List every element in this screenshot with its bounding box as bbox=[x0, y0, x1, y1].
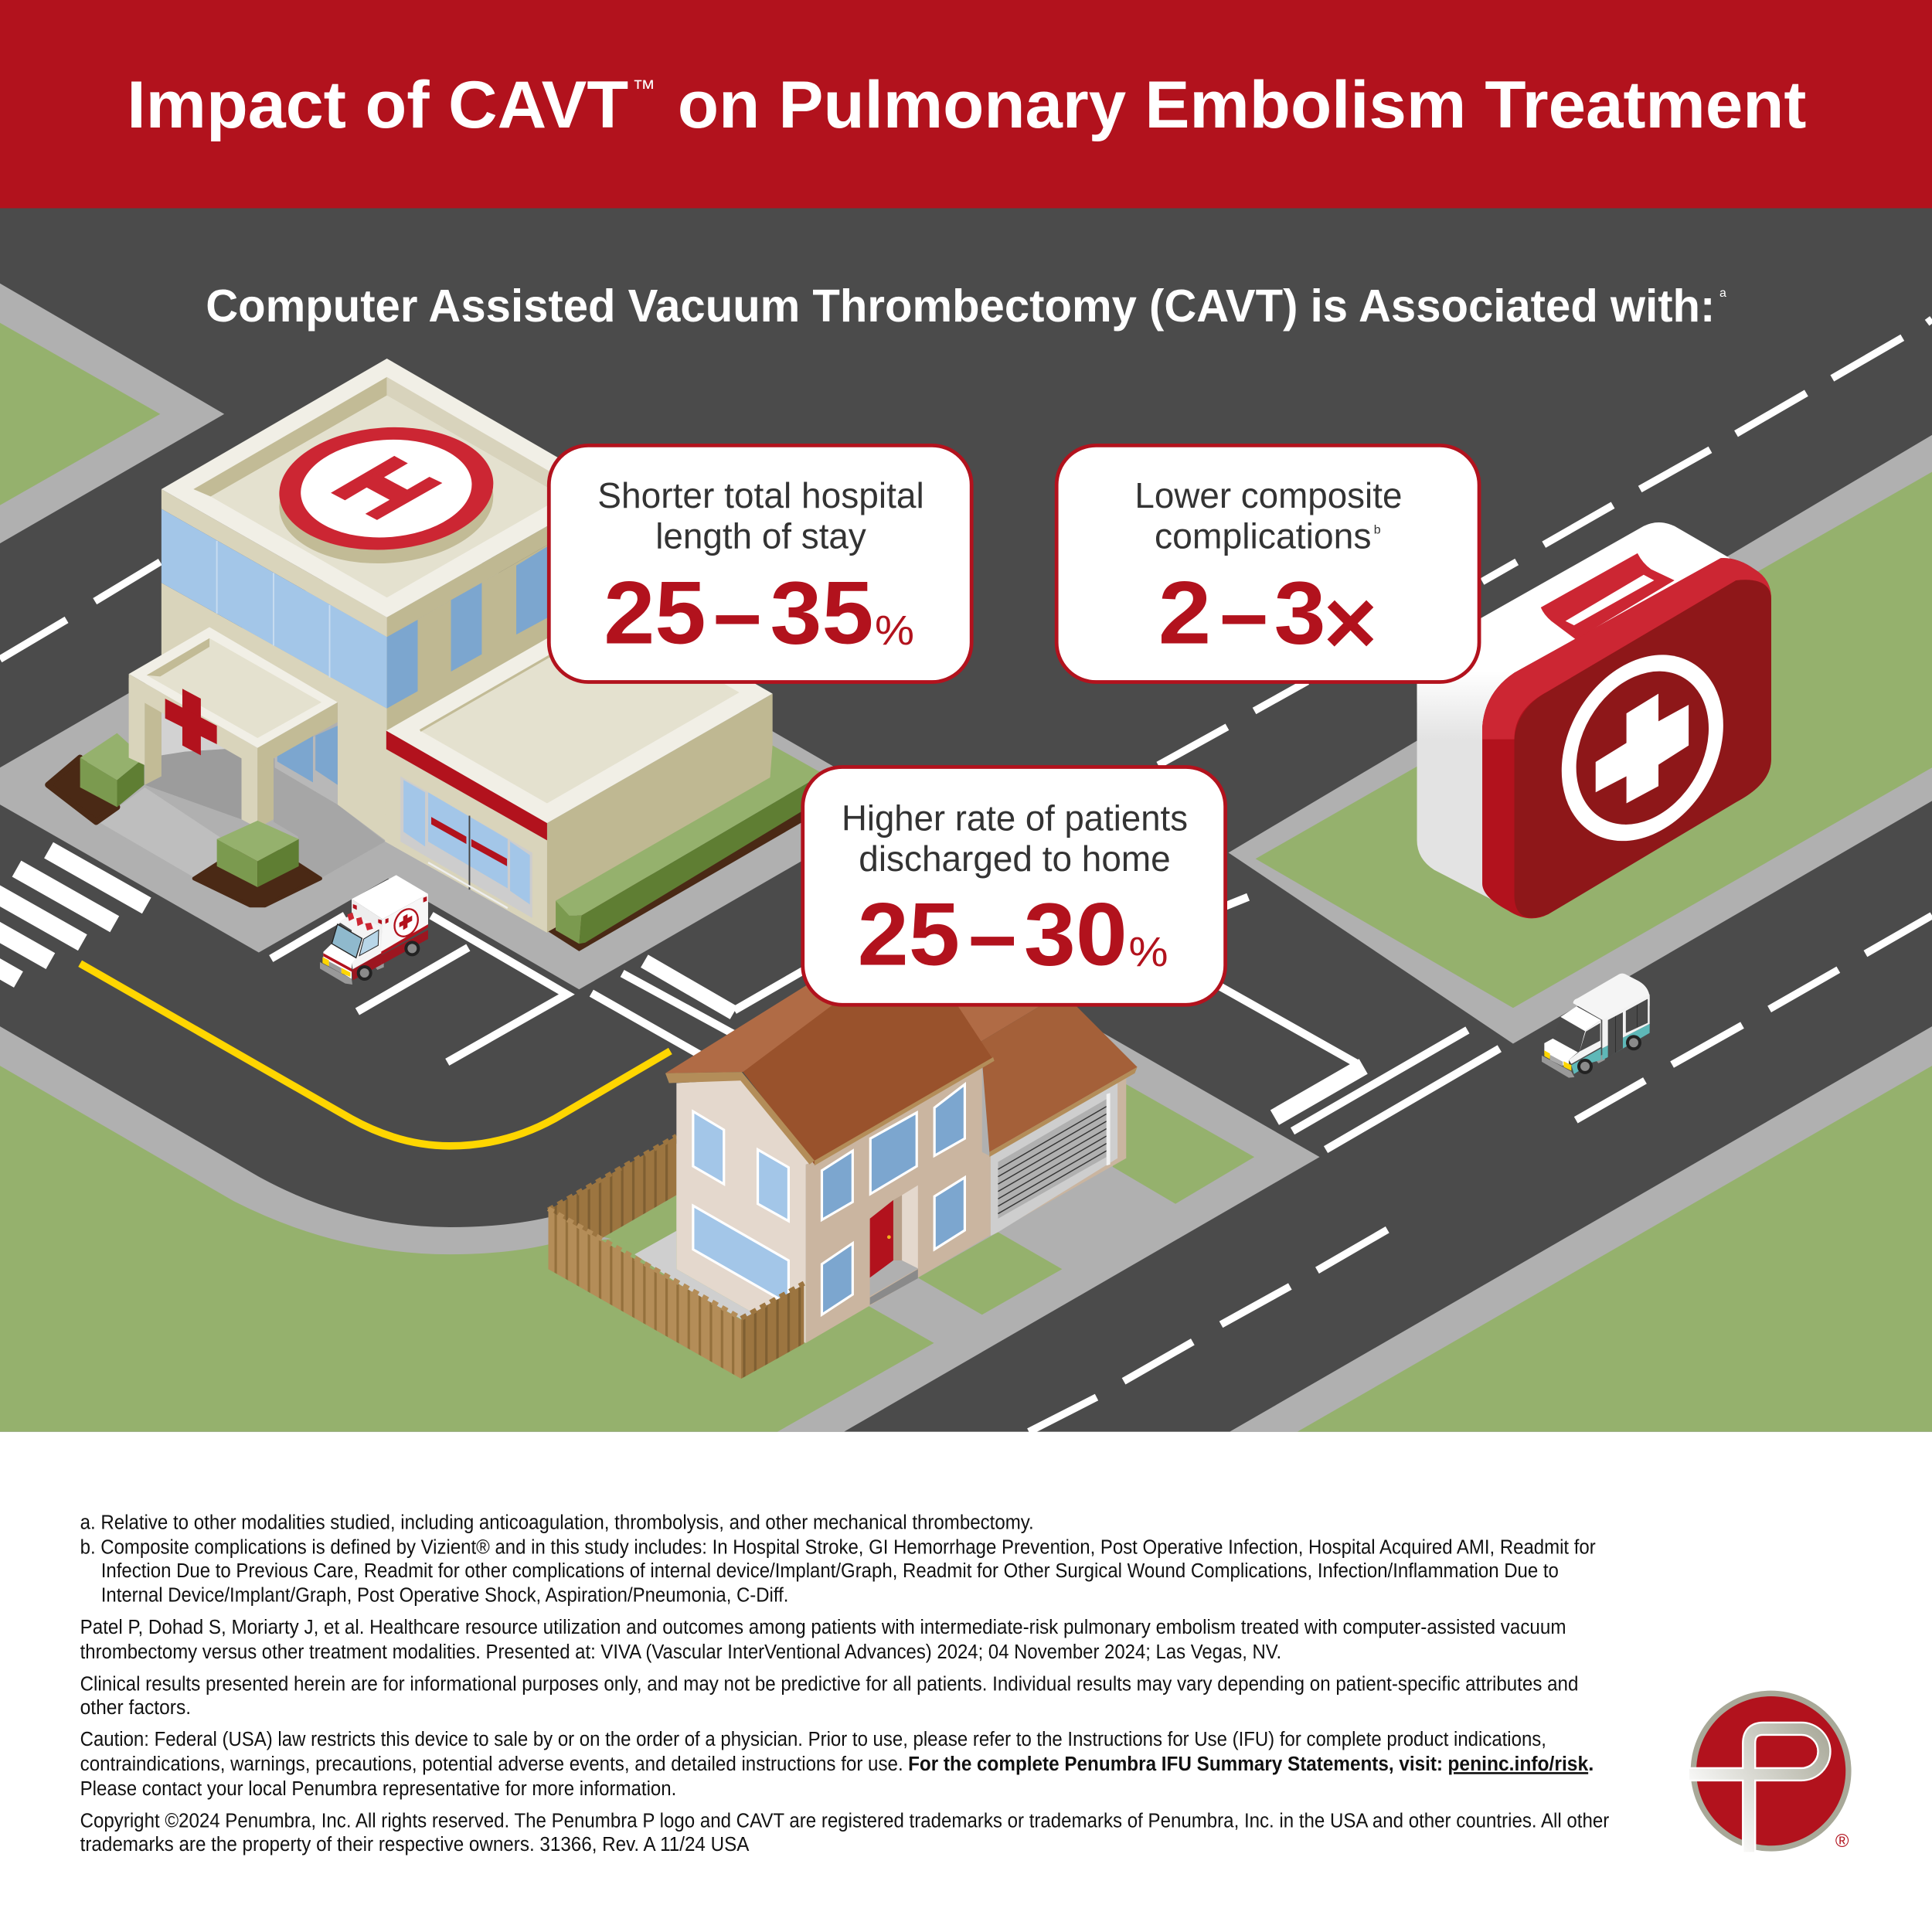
lane dashes: lower avenue bbox=[1029, 916, 1932, 1432]
title: on Pulmonary Embolism Treatment bbox=[678, 68, 1806, 142]
house roof bbox=[665, 974, 995, 1165]
title bbox=[127, 68, 1806, 142]
callout: discharged home: % bbox=[1128, 929, 1168, 975]
footnotes: trademarks are the property of their respective owners. 31366, Rev. A 11/24 USA bbox=[80, 1832, 750, 1855]
kit face bbox=[1515, 580, 1771, 917]
house with fence bbox=[549, 974, 1138, 1379]
heading: Computer Assisted Vacuum Thrombectomy (CAVT) is Associated with: bbox=[206, 281, 1715, 332]
main block walls bbox=[162, 489, 612, 842]
callout: complications: – bbox=[1219, 563, 1268, 662]
footnotes: For the complete Penumbra IFU Summary Statements, visit: bbox=[908, 1752, 1443, 1775]
block: house lawn and sidewalk bbox=[0, 1016, 1320, 1432]
kit handle bbox=[1541, 553, 1675, 639]
front fence bbox=[549, 1209, 804, 1379]
footnotes bbox=[80, 1511, 1609, 1855]
title: Impact of CAVT bbox=[127, 68, 628, 142]
helipad bbox=[275, 420, 498, 570]
callout: hospital stay: % bbox=[875, 607, 914, 654]
footnotes: Patel P, Dohad S, Moriarty J, et al. Healthcare resource utilization and outcomes among patients with intermediate-risk pulmonary embolism treated with computer-assisted vacuum bbox=[80, 1615, 1566, 1638]
footnotes: other factors. bbox=[80, 1696, 191, 1719]
footnotes: b. Composite complications is defined by Vizient® and in this study includes: In Hospital Stroke, GI Hemorrhage Prevention, Post Operative Infection, Hospital Acquired AMI, Readmit for bbox=[80, 1536, 1596, 1559]
title: ™ bbox=[632, 76, 655, 101]
callout: hospital stay: length of stay bbox=[655, 516, 867, 556]
footnotes: Copyright ©2024 Penumbra, Inc. All rights reserved. The Penumbra P logo and CAVT are registered trademarks or trademarks of Penumbra, Inc. in the USA and other countries. All other bbox=[80, 1808, 1609, 1832]
footnotes: . bbox=[1588, 1752, 1594, 1775]
callout: hospital stay: – bbox=[713, 563, 761, 662]
hospital grounds bbox=[99, 758, 385, 879]
house walls bbox=[676, 1068, 989, 1343]
icon: red cross sign bbox=[165, 689, 217, 755]
footnotes: Clinical results presented herein are for informational purposes only, and may not be predictive for all patients. Individual results may vary depending on patient-specific attributes and bbox=[80, 1672, 1578, 1696]
kit back shell bbox=[1417, 522, 1730, 912]
road markings bbox=[0, 319, 1932, 1432]
block: medkit lawn bbox=[1229, 435, 1932, 1043]
callout: discharged home: 30 bbox=[1024, 885, 1128, 984]
callout: discharged home: Higher rate of patients bbox=[842, 798, 1188, 838]
back fence and yard bbox=[549, 1136, 806, 1343]
entrance door bbox=[275, 726, 338, 804]
crosswalk bbox=[0, 850, 147, 980]
footnotes: contraindications, warnings, precautions, potential adverse events, and detailed instructions for use. bbox=[80, 1752, 903, 1775]
footnotes: Caution: Federal (USA) law restricts this device to sale by or on the order of a physician. Prior to use, please refer to the Instructions for Use (IFU) for complete product indications, bbox=[80, 1727, 1546, 1750]
callout: complications: 3 bbox=[1274, 563, 1326, 662]
street scene bbox=[0, 208, 1932, 1432]
block: hospital sidewalk bbox=[0, 526, 900, 989]
callout: hospital stay: 35 bbox=[770, 563, 873, 662]
lane dashes: upper avenue bbox=[0, 319, 1932, 765]
left shrub bbox=[48, 733, 145, 821]
callout: hospital stay: 25 bbox=[604, 563, 706, 662]
callout: hospital stay bbox=[549, 445, 971, 682]
roof with helipad bbox=[162, 359, 612, 617]
low wing bbox=[385, 601, 773, 933]
front door and step bbox=[870, 1185, 918, 1304]
footnotes: thrombectomy versus other treatment modalities. Presented at: VIVA (Vascular InterVentional Advances) 2024; 04 November 2024; Las Vegas, NV. bbox=[80, 1640, 1281, 1663]
callout: complications bbox=[1056, 445, 1479, 682]
logo: Penumbra P bbox=[1689, 1691, 1852, 1852]
footnotes: Infection Due to Previous Care, Readmit for other complications of internal device/Implant/Graph, Readmit for Other Surgical Wound Complications, Infection/Inflammation Due to bbox=[101, 1559, 1559, 1582]
callout: complications: × bbox=[1324, 572, 1377, 675]
icon: medical cross bbox=[1529, 625, 1756, 870]
footnotes: peninc.info/risk bbox=[1447, 1752, 1589, 1775]
yellow curb line bbox=[80, 964, 670, 1146]
hospital bbox=[48, 359, 823, 951]
callout: complications: Lower composite bbox=[1134, 475, 1402, 515]
footnotes: Internal Device/Implant/Graph, Post Operative Shock, Aspiration/Pneumonia, C-Diff. bbox=[101, 1583, 788, 1607]
house windows bbox=[693, 1084, 964, 1315]
logo: Penumbra P: ® bbox=[1835, 1831, 1849, 1852]
portico bbox=[129, 628, 338, 828]
ambulance bbox=[320, 875, 428, 985]
footnotes: Please contact your local Penumbra representative for more information. bbox=[80, 1777, 676, 1800]
callout: complications: b bbox=[1374, 523, 1381, 536]
header banner bbox=[0, 0, 1932, 209]
medkit bbox=[1417, 522, 1771, 918]
callout: complications: complications bbox=[1155, 516, 1372, 556]
storefront windows bbox=[400, 776, 532, 918]
callout: discharged home: – bbox=[968, 885, 1016, 984]
callout: complications: 2 bbox=[1158, 563, 1211, 662]
shuttle bus bbox=[1542, 974, 1650, 1078]
kit front frame bbox=[1482, 558, 1771, 918]
front shrub bbox=[194, 821, 321, 906]
callout: discharged home: 25 bbox=[858, 885, 960, 984]
block: top-left lawn bbox=[0, 284, 224, 543]
heading: a bbox=[1719, 287, 1726, 300]
callout: discharged home: discharged to home bbox=[859, 838, 1171, 879]
hedge beside wing bbox=[549, 746, 823, 951]
garage bbox=[950, 1005, 1138, 1236]
callout: discharged home bbox=[803, 767, 1226, 1005]
block: bottom-right lawn bbox=[1230, 1026, 1932, 1432]
callout: hospital stay: Shorter total hospital bbox=[597, 475, 924, 515]
footnotes: a. Relative to other modalities studied, including anticoagulation, thrombolysis, and other mechanical thrombectomy. bbox=[80, 1511, 1034, 1534]
parking bays bbox=[271, 897, 1499, 1150]
